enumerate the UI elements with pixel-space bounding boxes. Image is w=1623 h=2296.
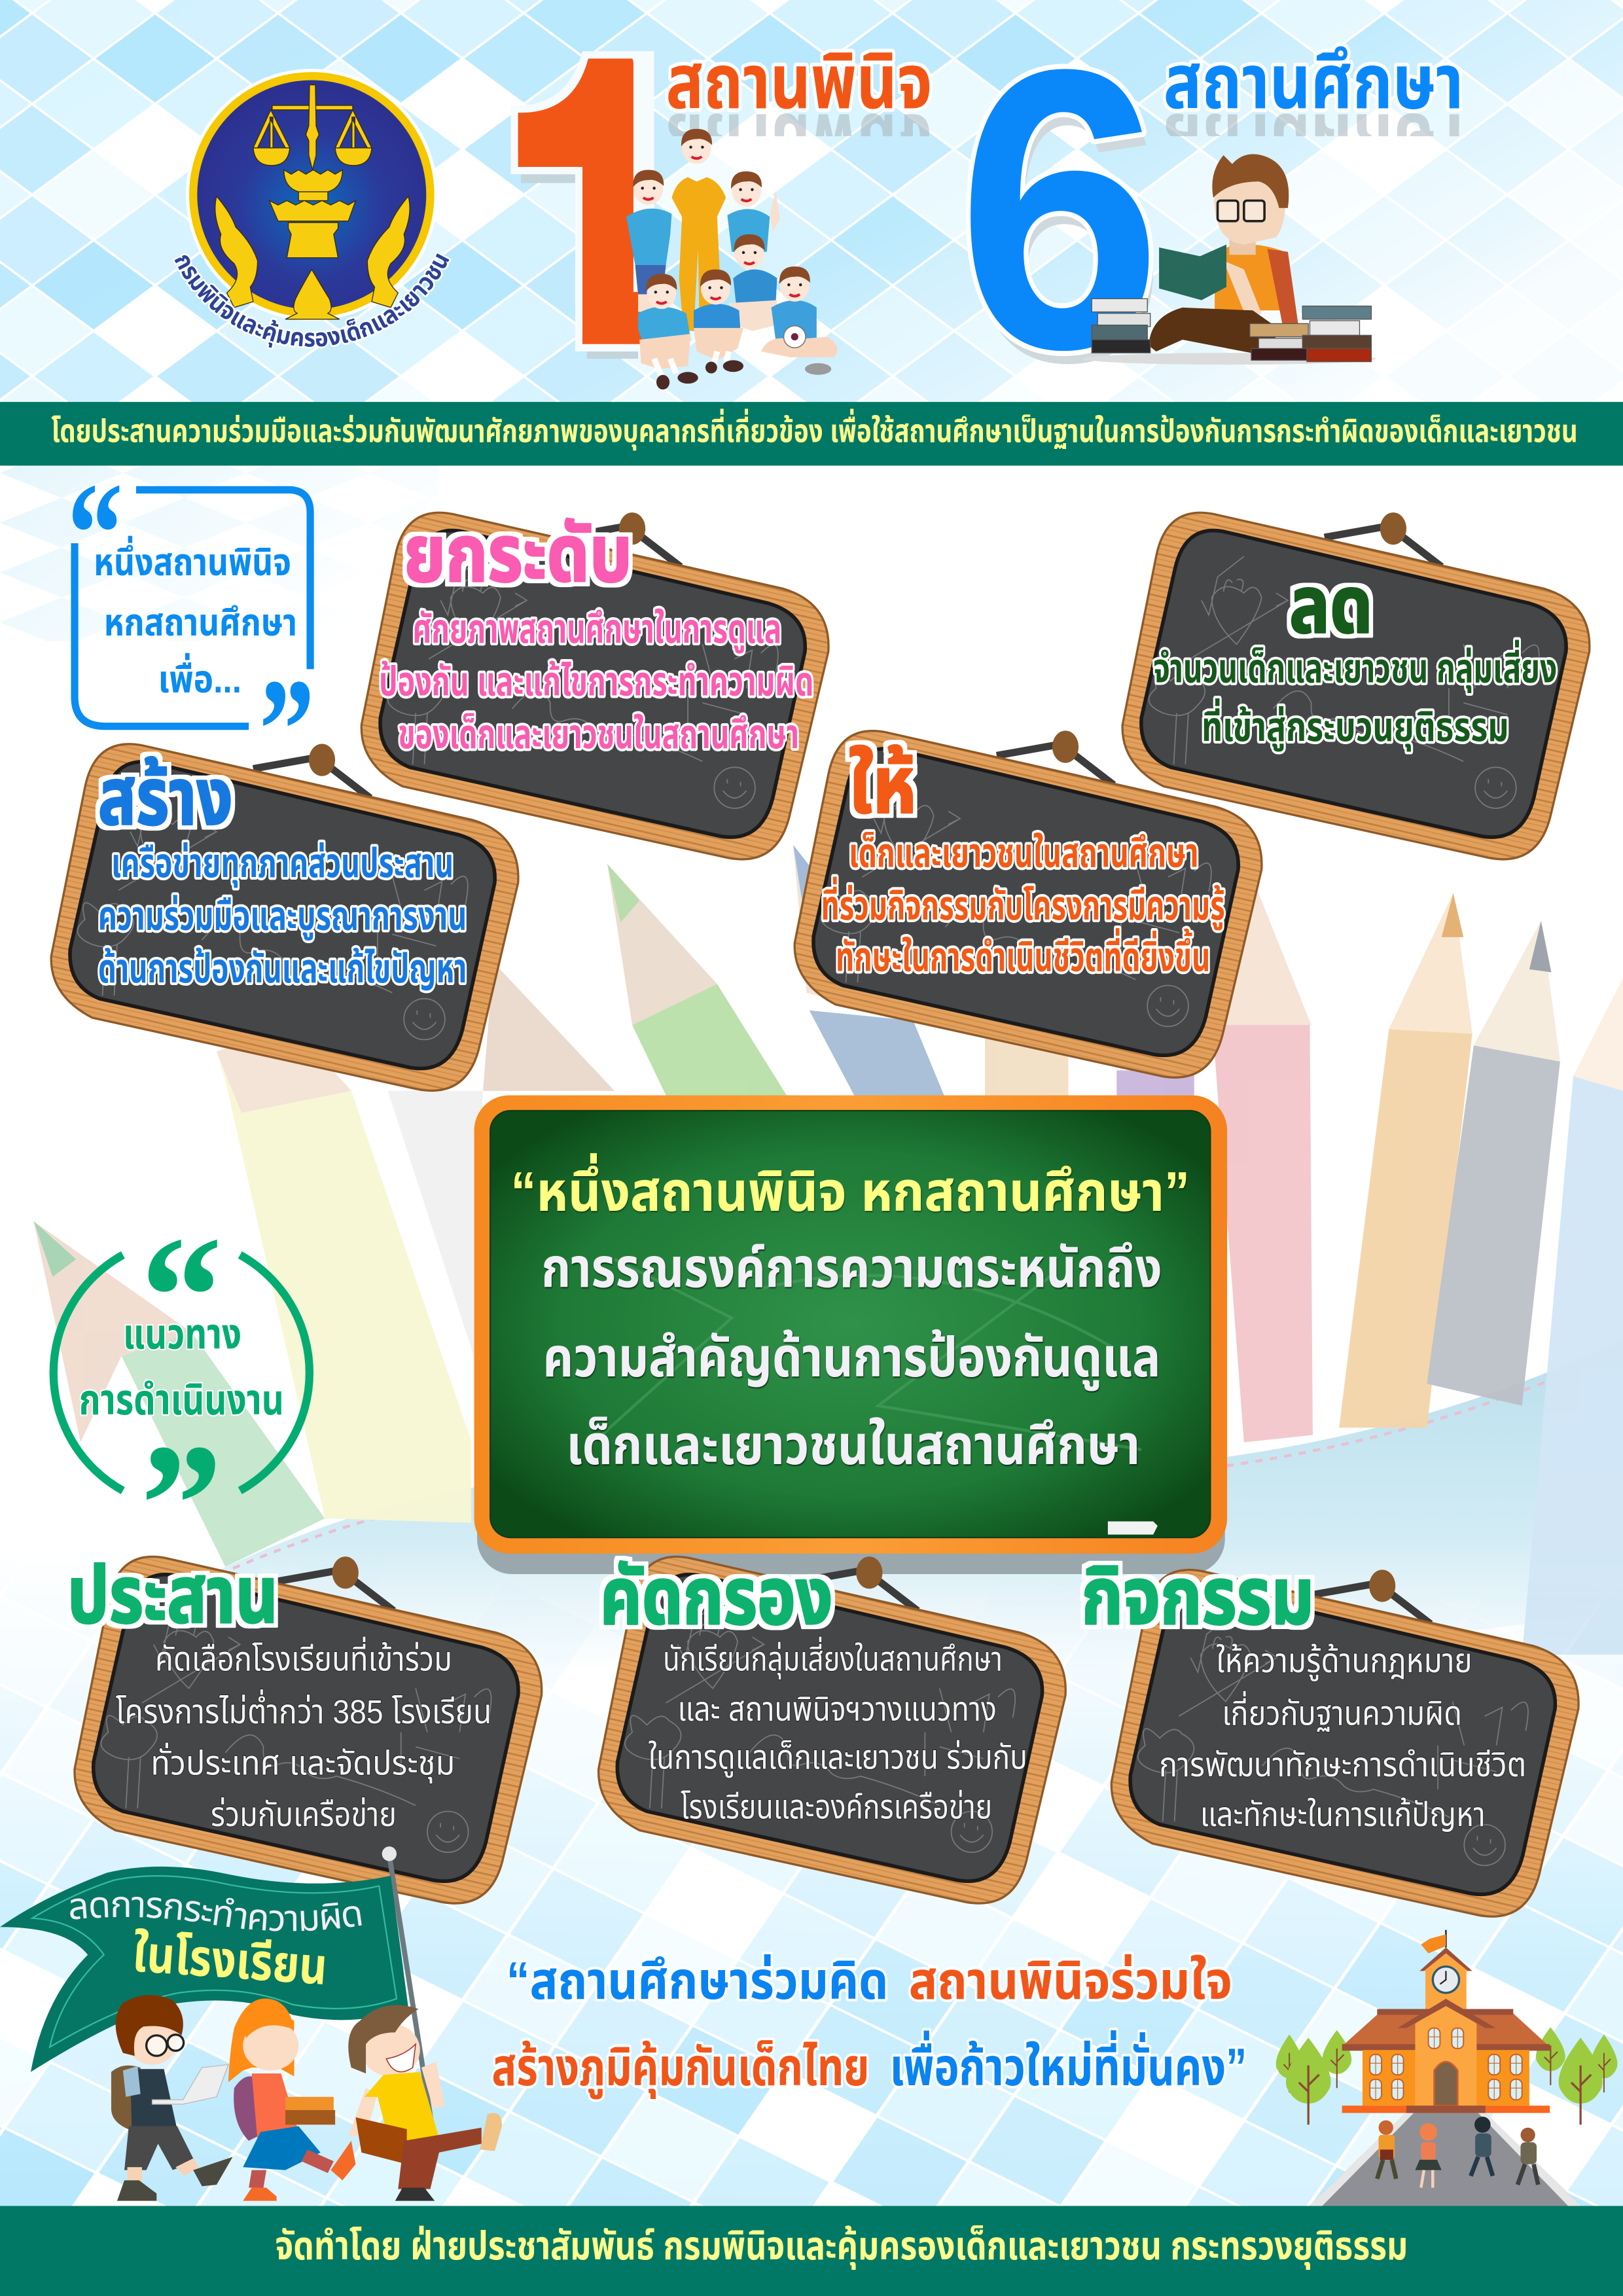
slogan: เพื่อก้าวใหม่ที่มั่นคง” — [890, 2030, 1247, 2097]
chalkboard: ยกระดับ: ศักยภาพสถานศึกษาในการดูแล — [413, 606, 781, 654]
quote box: หนึ่งสถานพินิจ หกสถานศึกษา เพื่อ: หกสถานศึกษา — [104, 601, 297, 644]
main green chalkboard: เด็กและเยาวชนในสถานศึกษา — [566, 1414, 1140, 1477]
illustration: officer with six boys — [626, 129, 837, 389]
heading: สถานศึกษา: สถานศึกษา — [1164, 98, 1463, 183]
illustration: school building with children — [1276, 1930, 1617, 2207]
chalkboard: ยกระดับ: ป้องกัน และแก้ไขการกระทำความผิด — [379, 659, 813, 705]
chalkboard: ยกระดับ — [361, 510, 829, 859]
heading: สถานพินิจ: สถานพินิจ — [666, 98, 932, 183]
main green chalkboard: “หนึ่งสถานพินิจ หกสถานศึกษา” — [510, 1153, 1190, 1223]
chalkboard: ประสาน: คัดเลือกโรงเรียนที่เข้าร่วม — [155, 1637, 452, 1678]
bottom banner: จัดทำโดย ฝ่ายประชาสัมพันธ์ กรมพินิจและคุ้มครองเด็กและเยาวชน กระทรวงยุติธรรม — [275, 2223, 1408, 2270]
chalkboard: ประสาน — [67, 1551, 542, 1903]
chalkboard: กิจกรรม — [1082, 1552, 1578, 1916]
chalkboard: ลด: ลด — [1289, 561, 1373, 649]
slogan — [491, 1952, 1247, 2099]
chalkboard: ให้: ทักษะในการดำเนินชีวิตที่ดียิ่งขึ้น — [836, 928, 1210, 980]
heading: สถานศึกษา: สถานศึกษา — [1164, 40, 1463, 125]
heading: สถานพินิจ: สถานพินิจ — [666, 40, 932, 125]
chalkboard: ประสาน: ประสาน — [67, 1551, 278, 1640]
main green chalkboard: การรณรงค์การความตระหนักถึง — [541, 1238, 1162, 1300]
chalkboard: กิจกรรม: และทักษะในการแก้ปัญหา — [1200, 1795, 1486, 1833]
guideline circle: แนวทางการดำเนินงาน: การดำเนินงาน — [79, 1376, 284, 1424]
chalkboard: ลด — [1122, 512, 1590, 859]
chalkboard: ประสาน: ร่วมกับเครือข่าย — [211, 1795, 397, 1833]
chalkboard: คัดกรอง: และ สถานพินิจฯวางแนวทาง — [677, 1690, 997, 1728]
chalkboard: ให้: ให้ — [849, 742, 916, 830]
slogan: สถานพินิจร่วมใจ — [909, 1952, 1232, 2011]
quote box: หนึ่งสถานพินิจ หกสถานศึกษา เพื่อ: หนึ่งสถานพินิจ — [94, 535, 291, 584]
numeral 1 with white edge and grey shadow — [510, 51, 654, 359]
numeral 6: 6 — [961, 0, 1166, 444]
chalkboard: กิจกรรม: กิจกรรม — [1082, 1552, 1314, 1641]
guideline circle: แนวทางการดำเนินงาน — [54, 1201, 310, 1600]
guideline circle: แนวทางการดำเนินงาน: “ — [141, 1201, 223, 1392]
chalkboard: ประสาน: ทั่วประเทศ และจัดประชุม — [151, 1742, 455, 1784]
chalkboard: ให้: ที่ร่วมกิจกรรมกับโครงการมีความรู้ — [821, 877, 1225, 931]
chalkboard: สร้าง: เครือข่ายทุกภาคส่วนประสาน — [111, 840, 454, 888]
chalkboard: ลด: ที่เข้าสู่กระบวนยุติธรรม — [1202, 698, 1509, 752]
chalkboard: สร้าง — [51, 744, 518, 1090]
chalkboard: กิจกรรม: การพัฒนาทักษะการดำเนินชีวิต — [1159, 1746, 1526, 1784]
chalkboard: ให้ — [794, 730, 1262, 1077]
chalkboard: ให้: เด็กและเยาวชนในสถานศึกษา — [849, 830, 1198, 876]
flag with pole: ในโรงเรียน — [131, 1924, 329, 1996]
chalkboard: ประสาน: โครงการไม่ต่ำกว่า 385 โรงเรียน — [116, 1689, 491, 1731]
guideline circle: แนวทางการดำเนินงาน: ” — [141, 1409, 223, 1600]
heading: สถานพินิจ — [665, 48, 933, 136]
chalkboard: คัดกรอง: ในการดูแลเด็กและเยาวชน ร่วมกับ — [649, 1738, 1027, 1778]
quote box: หนึ่งสถานพินิจ หกสถานศึกษา เพื่อ: ” — [259, 649, 315, 811]
slogan: สร้างภูมิคุ้มกันเด็กไทย — [491, 2038, 869, 2099]
top banner — [0, 402, 1623, 465]
chalkboard: ยกระดับ: ของเด็กและเยาวชนในสถานศึกษา — [398, 711, 799, 757]
chalkboard: คัดกรอง: นักเรียนกลุ่มเสี่ยงในสถานศึกษา — [663, 1637, 1003, 1680]
chalkboard: กิจกรรม: ให้ความรู้ด้านกฎหมาย — [1216, 1641, 1472, 1681]
flag with pole — [0, 1846, 433, 2119]
chalkboard: กิจกรรม: เกี่ยวกับฐานความผิด — [1222, 1691, 1462, 1732]
chalkboard: คัดกรอง: คัดกรอง — [600, 1552, 832, 1641]
logo: Department of Juvenile Observation and Protection — [173, 69, 452, 350]
chalkboard: คัดกรอง: โรงเรียนและองค์กรเครือข่าย — [681, 1788, 992, 1826]
main green chalkboard — [474, 1095, 1227, 1574]
main green chalkboard: ความสำคัญด้านการป้องกันดูแล — [543, 1327, 1160, 1391]
chalkboard: ยกระดับ: ยกระดับ — [404, 510, 632, 598]
chalkboard: สร้าง: ความร่วมมือและบูรณาการงาน — [98, 893, 467, 941]
quote box: หนึ่งสถานพินิจ หกสถานศึกษา เพื่อ — [67, 453, 315, 811]
logo: Department of Juvenile Observation and Protection: กรมพินิจและคุ้มครองเด็กและเยาวชน — [173, 251, 452, 350]
quote box: หนึ่งสถานพินิจ หกสถานศึกษา เพื่อ: เพื่อ... — [158, 653, 241, 701]
bottom banner — [0, 2206, 1623, 2296]
flag with pole: ลดการกระทำความผิด — [70, 1897, 362, 1931]
slogan: “สถานศึกษาร่วมคิด — [507, 1952, 888, 2011]
guideline circle: แนวทางการดำเนินงาน: แนวทาง — [123, 1310, 241, 1358]
quote box: หนึ่งสถานพินิจ หกสถานศึกษา เพื่อ: “ — [67, 453, 123, 615]
chalkboard: สร้าง: สร้าง — [98, 753, 233, 842]
chalkboard: คัดกรอง — [599, 1552, 1065, 1903]
illustration: three children walking — [111, 1995, 502, 2201]
chalkboard: สร้าง: ด้านการป้องกันและแก้ไขปัญหา — [98, 946, 467, 992]
illustration: student reading on books — [1083, 154, 1376, 365]
